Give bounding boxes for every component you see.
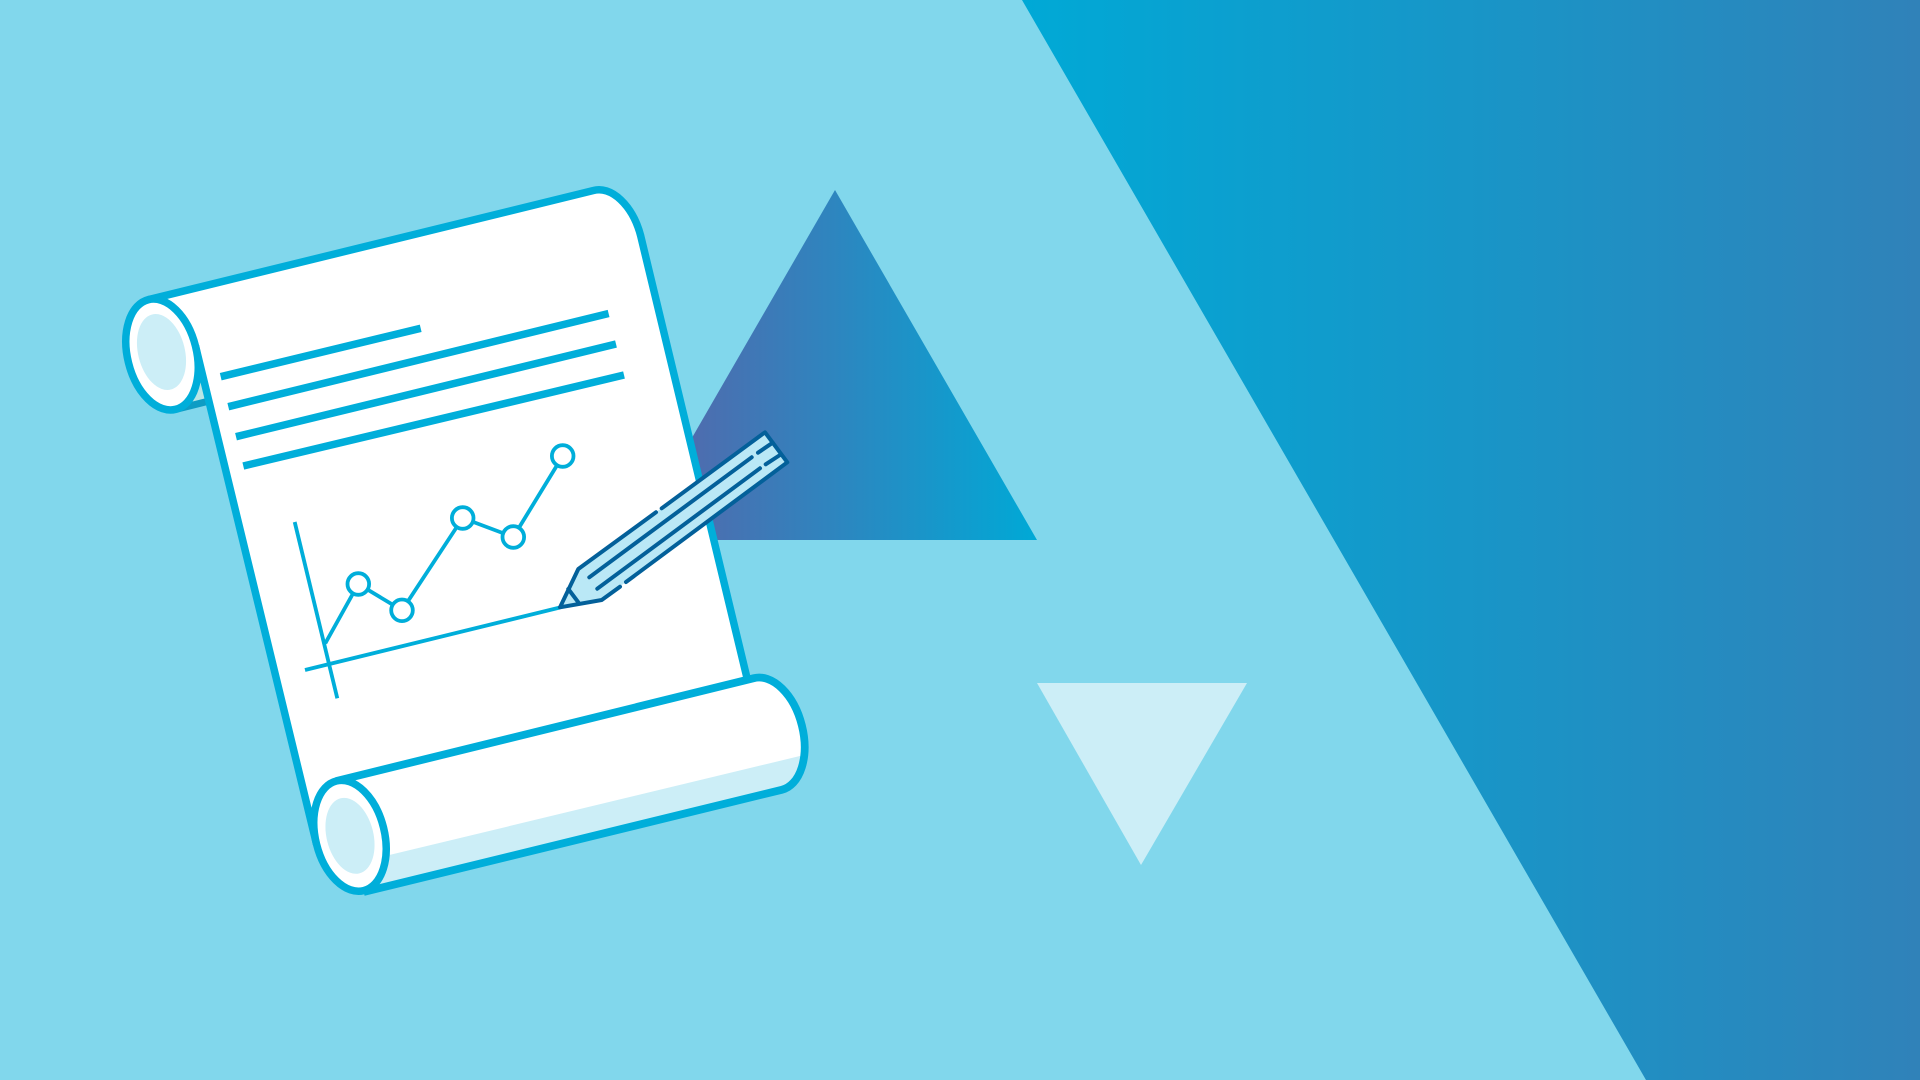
roll end cap (303, 773, 397, 899)
pencil inner lines (589, 443, 780, 589)
top roll end hole (129, 309, 194, 395)
roll body (313, 678, 805, 893)
upward gradient triangle (633, 190, 1037, 540)
scroll illustration (115, 190, 810, 930)
roll outline (336, 678, 805, 892)
pencil body fill (560, 432, 787, 607)
pencil tip divider (568, 589, 578, 602)
data line (325, 456, 563, 643)
top roll end cap (115, 291, 209, 418)
paper sheet (148, 190, 747, 844)
chart y axis (295, 522, 337, 698)
pencil outline (560, 432, 787, 607)
roll shadow (380, 756, 800, 884)
top roll (115, 291, 209, 418)
text lines (221, 314, 624, 466)
line chart (295, 445, 574, 698)
back of top roll (176, 378, 208, 409)
data points (348, 445, 574, 621)
bottom roll (311, 674, 809, 896)
right gradient band (1022, 0, 1920, 1080)
pencil (560, 432, 787, 607)
downward pale triangle (1037, 683, 1247, 865)
roll end hole (318, 793, 382, 879)
chart x axis (305, 608, 560, 670)
paper outline (148, 190, 747, 844)
